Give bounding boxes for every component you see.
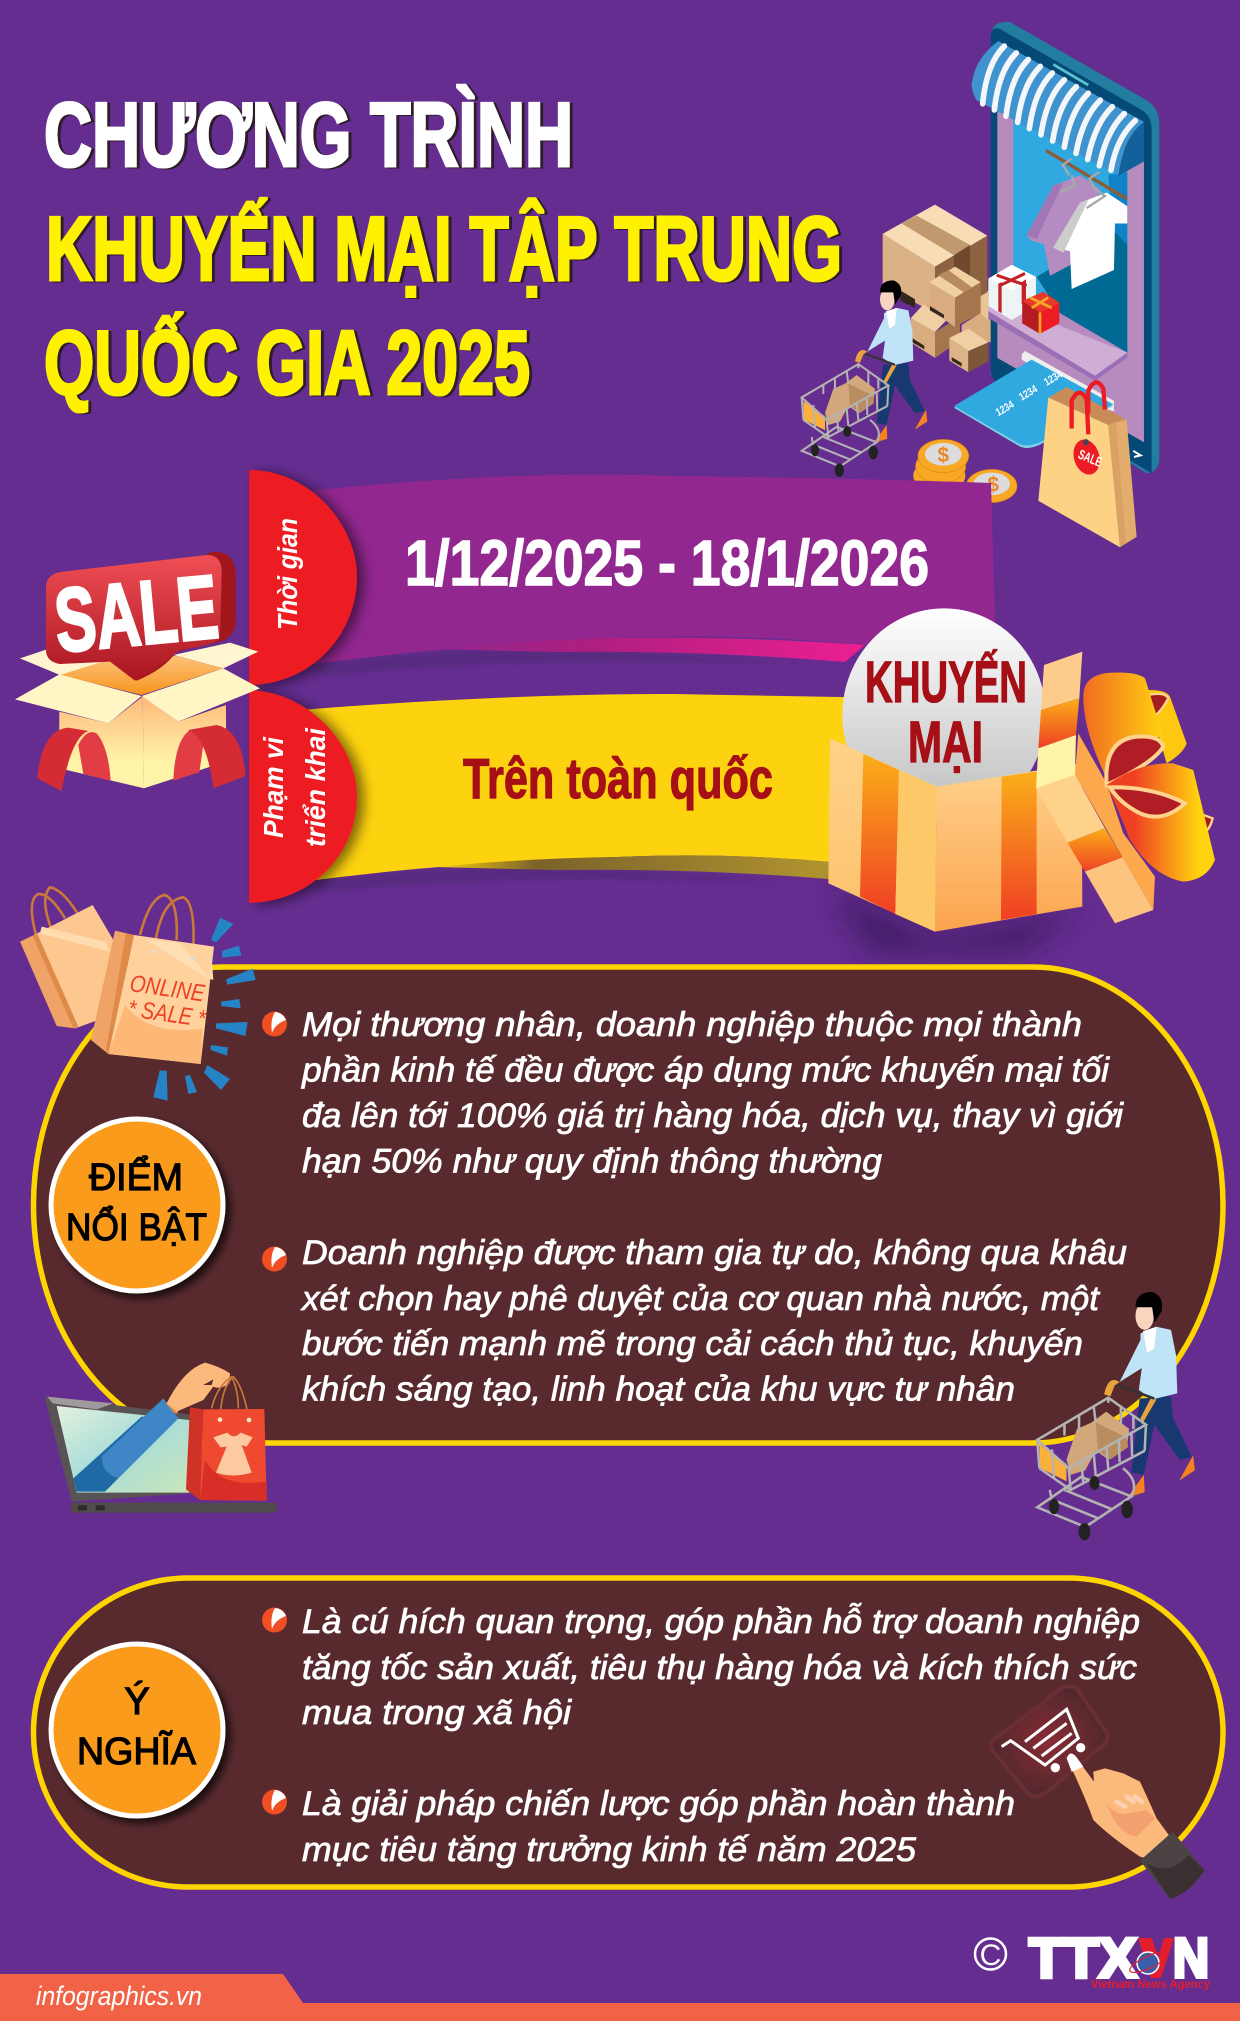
balloon text: MẠI [908,710,983,775]
badge: ĐIỂM NỔI BẬT [51,1119,223,1291]
credit card: 1234 [994,399,1017,419]
badge: Ý NGHĨA [51,1644,223,1816]
panel: highlights [34,967,1223,1443]
online sale label: ONLINE [128,970,207,1007]
label tab: Phạm vi triển khai: Phạm vi [258,736,289,838]
logo: TTXVN [1029,1926,1210,1991]
store awning [972,41,1144,176]
shopping bag with sale tag [1038,382,1137,547]
icon: laptop with hand and red bag [45,1363,277,1513]
text block: highlight 1: hạn 50% như quy định thông thường [302,1142,882,1180]
shopper with cart, lower [1037,1292,1195,1540]
title: KHUYẾN MẠI TẬP TRUNG [46,198,842,300]
balloon text [865,650,1027,775]
text block: highlight 2: bước tiến mạnh mẽ trong cải cách thủ tục, khuyến [302,1325,1083,1363]
online sale label [126,970,208,1033]
shelf with gifts [980,265,1127,411]
text block: highlight 1: đa lên tới 100% giá trị hàng hóa, dịch vụ, thay vì giới [302,1097,1124,1135]
phone body [991,22,1159,473]
text block: highlight 1: Mọi thương nhân, doanh nghiệp thuộc mọi thành [302,1006,1082,1044]
text block: significance 2: mục tiêu tăng trưởng kinh tế năm 2025 [302,1831,916,1869]
coins: $ [988,473,999,497]
credit card: 1234 [1042,368,1065,389]
badge: ĐIỂM NỔI BẬT: NỔI BẬT [66,1204,207,1249]
ribbon: scope (yellow) [300,694,900,892]
online sale label: * SALE * [126,995,208,1033]
logo: TTXVN: N [1173,1926,1209,1989]
cardboard boxes [883,205,991,372]
label tab: Thời gian [249,470,357,685]
clothes on rail [1027,151,1127,289]
footer bar [0,1974,1240,2021]
icon: sale gift box [15,552,260,791]
icon: hand pressing cart button [991,1686,1205,1899]
text block: highlight 2: xét chọn hay phê duyệt của cơ quan nhà nước, một [300,1280,1101,1318]
balloon text: KHUYẾN [865,650,1027,715]
scope value: Trên toàn quốc [463,747,773,811]
date value: 1/12/2025 - 18/1/2026 [405,527,929,599]
coins: $ [938,444,949,467]
title: CHƯƠNG TRÌNH [44,85,573,186]
label tab: Phạm vi triển khai [249,690,357,903]
illustration: phone shop with boxes, shopper, bag and coins [802,22,1159,502]
coins [913,439,1017,502]
copyright symbol: C [980,1939,1001,1972]
text block: significance 1: Là cú hích quan trọng, góp phần hỗ trợ doanh nghiệp [302,1603,1140,1641]
text block: significance 2: Là giải pháp chiến lược góp phần hoàn thành [302,1785,1015,1823]
title: QUỐC GIA 2025 [44,312,530,414]
text block: significance 1: tăng tốc sản xuất, tiêu thụ hàng hóa và kích thích sức [302,1649,1137,1687]
icon: online sale bags [20,887,256,1101]
panel: significance [34,1578,1223,1887]
text block: significance 2 [262,1785,1015,1869]
icon: gift box with bow and balloon [828,608,1215,953]
logo: TTXVN: Vietnam News Agency [1091,1977,1210,1991]
text block: highlight 2: khích sáng tạo, linh hoạt của khu vực tư nhân [302,1370,1015,1408]
text block: significance 1 [262,1603,1140,1732]
ribbon: time (purple) [300,475,995,676]
text block: highlight 1: phần kinh tế đều được áp dụng mức khuyến mại tối [301,1052,1110,1090]
text block: highlight 2: Doanh nghiệp được tham gia tự do, không qua khâu [302,1234,1127,1272]
label tab: Thời gian: Thời gian [272,518,303,630]
badge: ĐIỂM NỔI BẬT: ĐIỂM [89,1154,183,1199]
shopper with cart [802,280,927,477]
text block: highlight 2 [262,1234,1127,1408]
title [44,85,842,414]
text block: significance 1: mua trong xã hội [302,1694,573,1732]
shopping bag with sale tag: SALE [1076,448,1104,470]
footer source text: infographics.vn [36,1981,202,2011]
credit card [954,360,1113,448]
label tab: Phạm vi triển khai: triển khai [300,727,331,847]
badge: Ý NGHĨA: NGHĨA [77,1730,197,1773]
badge: Ý NGHĨA: Ý [124,1680,150,1723]
SALE label: SALE [51,557,222,672]
text block: highlight 1 [262,1006,1124,1180]
credit card: 1234 [1017,383,1040,404]
copyright symbol [975,1938,1006,1972]
logo: TTXVN: TTX [1029,1926,1137,1989]
